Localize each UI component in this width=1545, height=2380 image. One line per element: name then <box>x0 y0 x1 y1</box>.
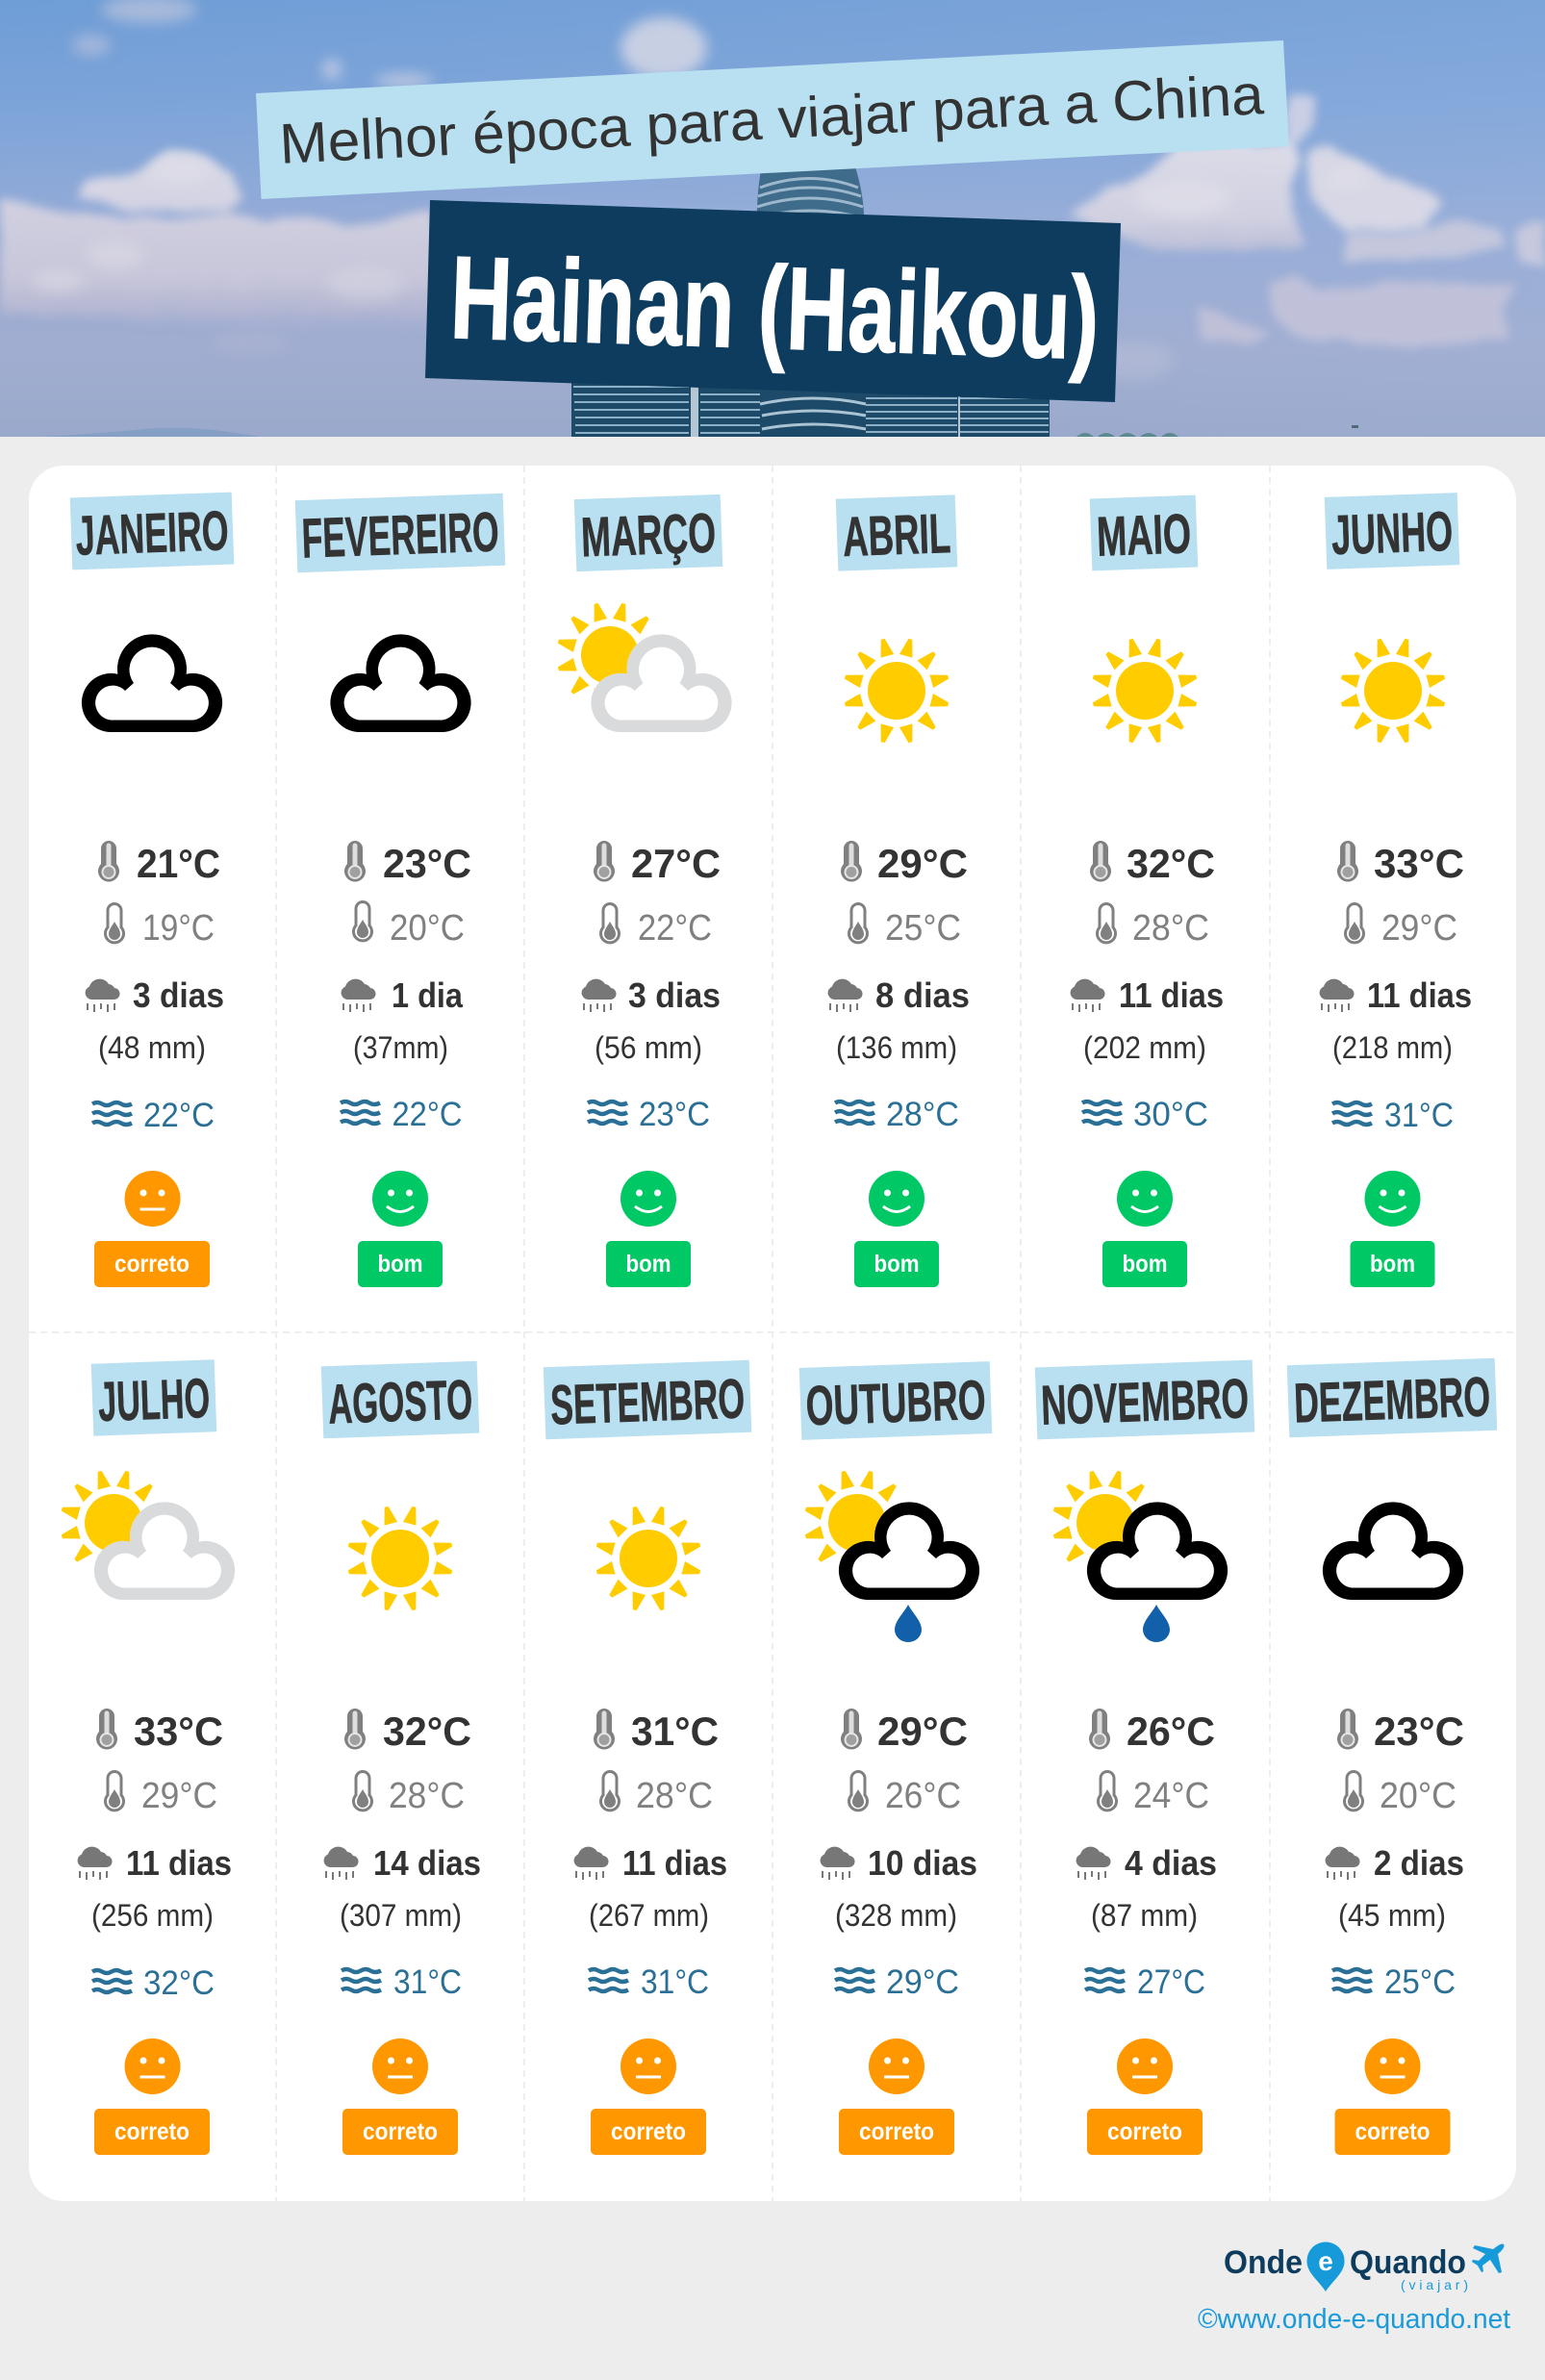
icon: max temperature <box>1337 1709 1358 1750</box>
rainy days: 2 dias <box>1374 1843 1464 1883</box>
rainy days: 8 dias <box>875 975 970 1015</box>
month: Novembro <box>1035 1360 1254 2155</box>
max temperature: 32°C <box>1127 841 1215 886</box>
heading: Janeiro <box>70 493 234 570</box>
logo: Onde e Quando: Onde <box>1224 2244 1303 2281</box>
title ribbon <box>425 200 1121 402</box>
sea temperature: 31°C <box>1384 1097 1454 1134</box>
icon: min temperature <box>848 904 868 943</box>
rating badge <box>1335 2109 1451 2155</box>
heading: Março: MARÇO <box>580 502 717 569</box>
icon: airplane <box>1472 2243 1505 2273</box>
heading: Setembro <box>544 1360 751 1439</box>
icon: cloud <box>1323 1502 1463 1600</box>
icon: happy face <box>621 1171 676 1227</box>
icon: happy face <box>869 1171 924 1227</box>
rainfall: (136 mm) <box>836 1030 957 1065</box>
rainy days: 1 dia <box>392 975 464 1015</box>
icon: max temperature <box>841 841 862 882</box>
heading: Novembro <box>1035 1360 1254 1439</box>
icon: min temperature <box>106 904 123 943</box>
logo: Onde e Quando <box>1224 2241 1505 2292</box>
max temperature: 26°C <box>1127 1709 1215 1754</box>
icon: max temperature <box>98 841 119 882</box>
min temperature: 29°C <box>1381 908 1457 949</box>
rainfall: (45 mm) <box>1338 1898 1446 1933</box>
sea temperature: 22°C <box>393 1096 462 1133</box>
icon: rain <box>1326 1847 1360 1880</box>
icon: rain <box>324 1847 359 1880</box>
icon: min temperature <box>600 904 620 943</box>
max temperature: 29°C <box>877 841 968 886</box>
icon: happy face <box>1117 1171 1173 1227</box>
icon: max temperature <box>594 1709 615 1750</box>
heading: Agosto <box>321 1361 479 1438</box>
sea temperature: 31°C <box>393 1963 462 2001</box>
rainfall: (87 mm) <box>1091 1898 1198 1933</box>
icon: sun <box>1092 638 1198 744</box>
rainy days: 11 dias <box>126 1843 232 1883</box>
rating badge <box>358 1241 443 1287</box>
min temperature: 25°C <box>885 908 961 949</box>
icon: sea <box>835 1969 874 1991</box>
max temperature: 33°C <box>134 1709 223 1754</box>
rating badge <box>591 2109 706 2155</box>
min temperature: 28°C <box>1132 908 1209 949</box>
rating badge: correto <box>114 2118 190 2145</box>
month: Janeiro <box>70 493 234 1287</box>
min temperature: 19°C <box>142 908 215 949</box>
rating badge: bom <box>1370 1251 1415 1278</box>
icon: sun, cloud and rain drop <box>1052 1470 1228 1642</box>
heading: Outubro: OUTUBRO <box>805 1369 987 1437</box>
min temperature: 20°C <box>1380 1776 1456 1816</box>
max temperature: 32°C <box>383 1709 471 1754</box>
month: Fevereiro <box>295 494 505 1287</box>
heading: Outubro <box>799 1361 992 1440</box>
icon: rain <box>582 979 617 1012</box>
max temperature: 21°C <box>137 841 220 886</box>
rainy days: 10 dias <box>868 1843 977 1883</box>
website credit: ©www.onde-e-quando.net <box>1198 2304 1510 2335</box>
upper tower <box>757 164 864 223</box>
sea temperature: 27°C <box>1137 1963 1205 2001</box>
icon: max temperature <box>344 841 366 882</box>
heading: Abril <box>836 494 957 571</box>
min temperature: 26°C <box>885 1776 961 1816</box>
icon: min temperature <box>354 1772 371 1810</box>
icon: sun <box>1340 638 1446 744</box>
rainy days: 3 dias <box>628 975 721 1015</box>
icon: min temperature <box>106 1772 123 1810</box>
rating badge: bom <box>1122 1251 1168 1278</box>
icon: rain <box>342 979 376 1012</box>
month: Junho <box>1320 493 1472 1287</box>
rating badge: bom <box>874 1251 920 1278</box>
month: Agosto <box>321 1361 481 2155</box>
rainy days: 11 dias <box>1119 975 1224 1015</box>
icon: rain <box>1071 979 1105 1012</box>
icon: sea <box>588 1101 627 1124</box>
icon: rain <box>828 979 863 1012</box>
month: Abril <box>828 494 970 1287</box>
rainy days: 14 dias <box>373 1843 481 1883</box>
rating badge <box>1102 1241 1187 1287</box>
icon: neutral face <box>621 2038 676 2094</box>
icon: max temperature <box>841 1709 862 1750</box>
min temperature: 29°C <box>141 1776 217 1816</box>
max temperature: 31°C <box>631 1709 719 1754</box>
heading: Setembro: SETEMBRO <box>549 1367 746 1437</box>
min temperature: 28°C <box>636 1776 713 1816</box>
icon: sun behind grey cloud <box>61 1470 235 1600</box>
logo: Onde e Quando: (viajar) <box>1401 2277 1468 2292</box>
sea temperature: 29°C <box>886 1963 959 2001</box>
icon: happy face <box>372 1171 428 1227</box>
icon: neutral face <box>372 2038 428 2094</box>
rainy days: 11 dias <box>622 1843 727 1883</box>
min temperature: 24°C <box>1133 1776 1209 1816</box>
icon: rain <box>78 1847 113 1880</box>
icon: happy face <box>1364 1171 1420 1227</box>
sea temperature: 23°C <box>639 1096 710 1133</box>
max temperature: 23°C <box>383 841 471 886</box>
sea temperature: 28°C <box>886 1096 959 1133</box>
heading: Maio <box>1090 495 1198 570</box>
icon: rain <box>86 979 120 1012</box>
icon: map pin: e <box>1318 2246 1333 2276</box>
icon: min temperature <box>1345 1772 1362 1810</box>
icon: sea <box>1332 1969 1372 1991</box>
icon: rain <box>1320 979 1355 1012</box>
rating badge: correto <box>859 2118 934 2145</box>
icon: sea <box>1332 1102 1372 1125</box>
icon: rain <box>821 1847 855 1880</box>
rating badge <box>342 2109 458 2155</box>
rainfall: (328 mm) <box>835 1898 957 1933</box>
heading: Maio: MAIO <box>1096 502 1192 569</box>
icon: cloud <box>82 634 222 732</box>
subtitle ribbon: Melhor época para viajar para a China <box>278 63 1265 176</box>
rainfall: (307 mm) <box>340 1898 462 1933</box>
sea temperature: 31°C <box>641 1963 709 2001</box>
icon: min temperature <box>600 1772 620 1810</box>
rating badge <box>854 1241 939 1287</box>
rainfall: (218 mm) <box>1332 1030 1453 1065</box>
rainy days: 3 dias <box>133 975 224 1015</box>
heading: Fevereiro: FEVEREIRO <box>301 500 500 570</box>
month: Março <box>557 494 732 1287</box>
heading: Agosto: AGOSTO <box>327 1368 473 1436</box>
rainy days: 4 dias <box>1125 1843 1217 1883</box>
icon: sea <box>92 1102 132 1125</box>
title ribbon: Hainan (Haikou) <box>448 232 1101 384</box>
month: Setembro <box>544 1360 751 2155</box>
rating badge <box>606 1241 691 1287</box>
month: Dezembro <box>1287 1358 1497 2155</box>
heading: Abril: ABRIL <box>842 502 951 569</box>
rainy days: 11 dias <box>1367 975 1472 1015</box>
rainfall: (202 mm) <box>1083 1030 1206 1065</box>
icon: sea <box>342 1969 381 1991</box>
rating badge: correto <box>1107 2118 1182 2145</box>
icon: rain <box>574 1847 609 1880</box>
rainfall: (267 mm) <box>589 1898 709 1933</box>
month: Maio <box>1071 495 1224 1287</box>
icon: max temperature <box>1090 841 1111 882</box>
month: Julho <box>61 1359 235 2155</box>
sea temperature: 30°C <box>1133 1096 1208 1133</box>
max temperature: 27°C <box>631 841 721 886</box>
sea temperature: 22°C <box>143 1097 215 1134</box>
max temperature: 29°C <box>877 1709 968 1754</box>
icon: map pin <box>1306 2241 1345 2291</box>
heading: Julho <box>91 1359 216 1436</box>
min temperature: 22°C <box>638 908 712 949</box>
icon: min temperature <box>1099 1772 1116 1810</box>
icon: sun behind grey cloud <box>557 602 732 732</box>
icon: sea <box>589 1969 628 1991</box>
icon: max temperature <box>594 841 615 882</box>
heading: Julho: JULHO <box>97 1367 211 1433</box>
rating badge: correto <box>363 2118 438 2145</box>
icon: max temperature <box>1337 841 1358 882</box>
rainfall: (37mm) <box>353 1030 448 1065</box>
rating badge <box>94 2109 210 2155</box>
heading: Março <box>574 494 722 571</box>
icon: neutral face <box>1364 2038 1420 2094</box>
icon: sea <box>92 1970 132 1992</box>
rating badge: correto <box>114 1251 190 1278</box>
heading: Fevereiro <box>295 494 505 572</box>
rating badge <box>839 2109 954 2155</box>
icon: cloud <box>330 634 471 732</box>
month: Outubro <box>799 1361 992 2155</box>
max temperature: 23°C <box>1374 1709 1464 1754</box>
rainfall: (56 mm) <box>595 1030 702 1065</box>
rating badge <box>94 1241 210 1287</box>
heading: Janeiro: JANEIRO <box>75 499 230 568</box>
sea temperature: 32°C <box>143 1964 215 2002</box>
logo: Onde e Quando: Quando <box>1350 2244 1466 2281</box>
icon: neutral face <box>125 2038 181 2094</box>
icon: neutral face <box>1117 2038 1173 2094</box>
icon: rain <box>1076 1847 1111 1880</box>
rating badge: correto <box>611 2118 686 2145</box>
rating badge <box>1351 1241 1435 1287</box>
icon: sea <box>1082 1101 1122 1124</box>
icon: min temperature <box>1345 904 1364 943</box>
banner photo: sky, clouds and towers <box>0 0 1545 437</box>
icon: neutral face <box>125 1171 181 1227</box>
rating badge: bom <box>625 1251 671 1278</box>
icon: max temperature <box>96 1709 117 1750</box>
icon: sun <box>595 1506 701 1611</box>
rating badge: bom <box>377 1251 423 1278</box>
icon: max temperature <box>1089 1709 1110 1750</box>
icon: sun <box>844 638 950 744</box>
icon: min temperature <box>848 1772 868 1810</box>
icon: sun, cloud and rain drop <box>804 1470 979 1642</box>
icon: max temperature <box>344 1709 366 1750</box>
icon: sea <box>835 1101 874 1124</box>
sea temperature: 25°C <box>1384 1963 1456 2001</box>
max temperature: 33°C <box>1374 841 1464 886</box>
heading: Novembro: NOVEMBRO <box>1040 1367 1250 1437</box>
min temperature: 28°C <box>389 1776 465 1816</box>
subtitle ribbon <box>256 40 1289 199</box>
min temperature: 20°C <box>390 908 465 949</box>
icon: min temperature <box>354 902 371 941</box>
rating badge: correto <box>1355 2118 1430 2145</box>
icon: neutral face <box>869 2038 924 2094</box>
icon: sun <box>347 1506 453 1611</box>
heading: Junho <box>1325 493 1459 570</box>
rainfall: (256 mm) <box>91 1898 214 1933</box>
icon: sea <box>341 1101 380 1124</box>
icon: sea <box>1085 1969 1125 1991</box>
icon: min temperature <box>1097 904 1116 943</box>
rating badge <box>1087 2109 1203 2155</box>
panel: monthly climate card <box>29 466 1516 2201</box>
lower towers <box>571 380 1050 437</box>
heading: Junho: JUNHO <box>1330 500 1454 567</box>
rainfall: (48 mm) <box>98 1030 206 1065</box>
